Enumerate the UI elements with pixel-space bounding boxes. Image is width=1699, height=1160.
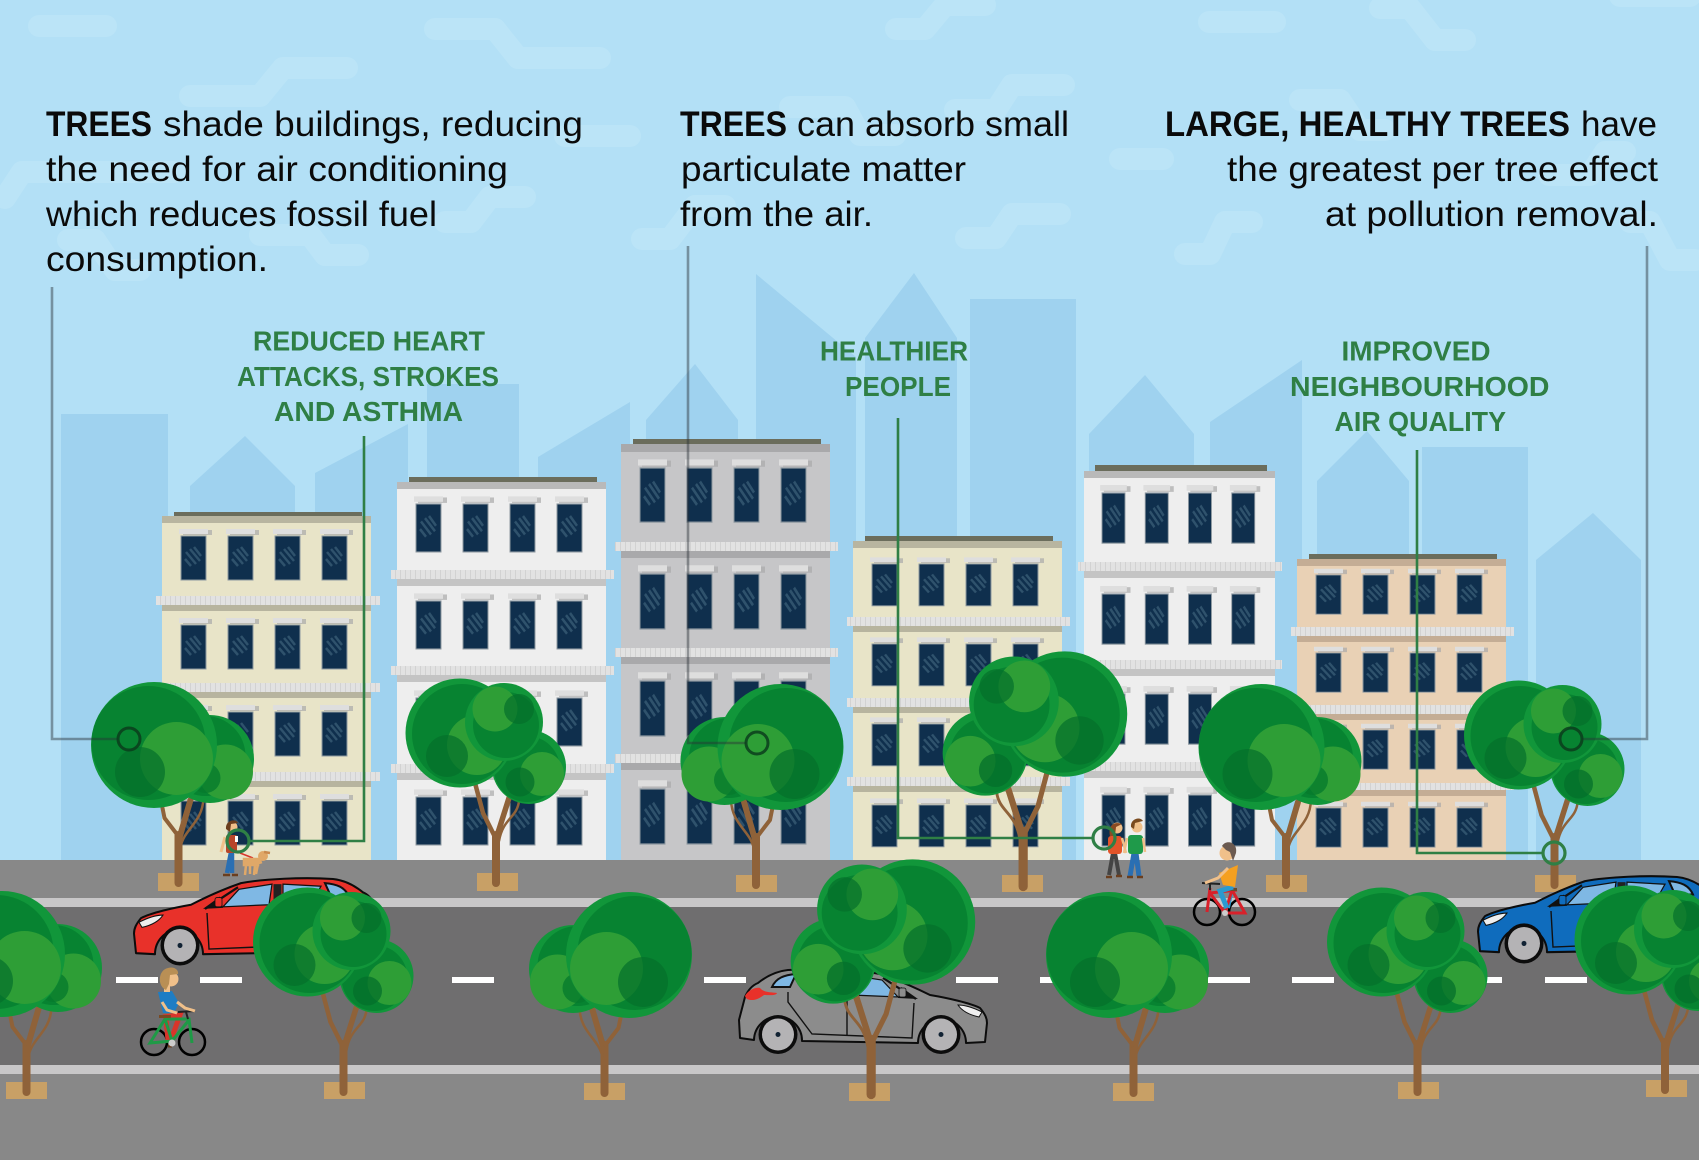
- tree: upper 4: [943, 651, 1127, 886]
- tree: lower 3: [529, 892, 692, 1093]
- distant skyline: [61, 273, 1641, 860]
- text block: trees shade buildings: shade buildings, reducing: [163, 104, 583, 144]
- car: red: [134, 878, 382, 966]
- couple walking: [1106, 819, 1145, 877]
- label: healthier people: PEOPLE: [845, 371, 951, 402]
- text block: trees shade buildings: which reduces fossil fuel: [45, 194, 437, 234]
- cyclist on green bike: [141, 967, 205, 1055]
- text block: large healthy trees: at pollution removal.: [1325, 194, 1658, 234]
- callout line: shade: [52, 287, 140, 750]
- cyclist on red bike: [1194, 842, 1255, 925]
- label: healthier people: [820, 336, 968, 402]
- clouds: [5, 0, 1695, 270]
- car: grey: [739, 969, 987, 1054]
- person walking a dog: [221, 820, 270, 875]
- text block: trees absorb particulate matter: [680, 104, 1069, 234]
- text block: trees absorb particulate matter: particulate matter: [681, 149, 966, 189]
- tree: lower 1: [0, 891, 102, 1092]
- text block: trees absorb particulate matter: from the air.: [680, 194, 873, 234]
- planters, upper row: [158, 873, 1576, 892]
- text block: large healthy trees: the greatest per tree effect: [1227, 149, 1658, 189]
- street: pavements, curbs and road: [0, 860, 1699, 1160]
- planters, lower row: [6, 1080, 1687, 1101]
- text block: trees shade buildings: consumption.: [46, 239, 268, 279]
- label: improved neighbourhood air quality: AIR QUALITY: [1334, 406, 1506, 437]
- tree: upper 3: [680, 684, 844, 885]
- building 5: white: [1078, 465, 1282, 860]
- text block: large healthy trees: LARGE, HEALTHY TREES: [1165, 104, 1570, 144]
- label: reduced heart attacks: AND ASTHMA: [274, 396, 463, 427]
- building 1: cream: [156, 512, 380, 860]
- tree: lower 2: [253, 888, 414, 1092]
- building 6: peach: [1291, 554, 1514, 860]
- callout line: particulate matter: [688, 246, 768, 754]
- callout line: large healthy trees: [1560, 246, 1647, 750]
- tree: upper 1: [91, 682, 254, 883]
- label: reduced heart attacks: ATTACKS, STROKES: [237, 361, 499, 392]
- tree: lower 6: [1327, 888, 1488, 1092]
- tree: upper 6: [1464, 680, 1624, 885]
- label: healthier people: HEALTHIER: [820, 336, 968, 366]
- label: improved neighbourhood air quality: IMPROVED: [1342, 336, 1490, 366]
- label: reduced heart attacks: REDUCED HEART: [253, 326, 485, 356]
- tree: upper 5: [1198, 684, 1362, 885]
- callout line: improved air quality: [1417, 450, 1565, 864]
- building 2: white: [391, 477, 614, 860]
- label: improved neighbourhood air quality: NEIGHBOURHOOD: [1290, 371, 1550, 402]
- tree: lower 5: [1046, 892, 1209, 1093]
- callout line: healthier people: [898, 418, 1115, 849]
- text block: trees shade buildings: [45, 104, 583, 279]
- tree: lower 4: [791, 859, 975, 1094]
- text block: large healthy trees: [1165, 104, 1658, 234]
- building 4: cream: [847, 536, 1070, 860]
- text block: large healthy trees: have: [1581, 104, 1657, 144]
- callout line: reduced heart attacks: [227, 436, 364, 852]
- text block: trees shade buildings: TREES: [46, 104, 152, 144]
- label: improved neighbourhood air quality: [1290, 336, 1550, 437]
- building 3: grey: [615, 439, 838, 860]
- label: reduced heart attacks: [237, 326, 499, 427]
- text block: trees shade buildings: the need for air conditioning: [46, 149, 508, 189]
- tree: lower 7: [1574, 886, 1699, 1090]
- car: blue: [1478, 876, 1699, 964]
- text block: trees absorb particulate matter: can absorb small: [797, 104, 1069, 144]
- tree: upper 2: [406, 678, 566, 883]
- text block: trees absorb particulate matter: TREES: [680, 104, 787, 144]
